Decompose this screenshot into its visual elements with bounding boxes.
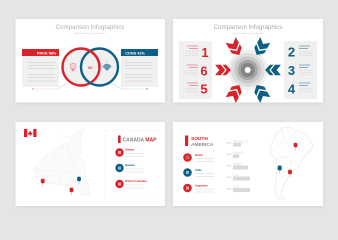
venn circles: VC [88, 66, 93, 70]
panel: six arrows [173, 19, 323, 103]
left card: pros: PROS 58% [37, 52, 57, 56]
item: quebec: Quebec [125, 163, 135, 167]
bar chart: 2016 [227, 154, 232, 156]
map pins [41, 177, 81, 196]
canada map outline [33, 129, 90, 196]
right card: cons: CONS 42% [125, 52, 145, 56]
heading: CANADA MAP [122, 138, 157, 144]
venn circles [62, 48, 118, 86]
left card [179, 41, 212, 99]
bar chart [227, 137, 250, 196]
icon: light bulb [70, 63, 76, 71]
arrows: red [215, 37, 244, 103]
panel: south america [173, 122, 323, 206]
right card [284, 41, 317, 99]
concentric target [228, 50, 268, 90]
bar chart: 2015 [227, 142, 232, 144]
item: chile [183, 168, 214, 177]
panel: venn comparison [16, 19, 165, 102]
heading: AMERICA [191, 142, 214, 148]
item: brazil: Brazil [195, 153, 203, 157]
title: Comparison Infographics [56, 24, 124, 31]
left card: 1 [201, 45, 209, 60]
heading: SOUTH [191, 136, 208, 142]
icon: canada flag [24, 129, 36, 137]
right card: 3 [288, 63, 295, 78]
right card: 4 [288, 82, 296, 96]
arrows: blue [252, 37, 281, 103]
bar chart: 2018 [227, 177, 232, 179]
item: ottawa: Ottawa [125, 148, 134, 152]
item: chile: Chile [195, 168, 202, 172]
connector lines [32, 82, 148, 90]
bar chart: 2019 [227, 188, 232, 190]
left card: 5 [200, 82, 208, 96]
side list panel [105, 130, 165, 199]
bar chart: 2017 [227, 166, 232, 168]
right card: cons [121, 49, 158, 87]
subtitle: Type The Subtitle Of Your Slide Here [233, 32, 263, 35]
map pins [278, 143, 297, 177]
icon: diamond [101, 60, 113, 71]
panel: canada map [16, 122, 165, 206]
item: argentina: Argentina [195, 184, 208, 188]
left card: 6 [200, 64, 208, 78]
item: brazil [183, 153, 214, 162]
south america map [270, 127, 313, 200]
subtitle: Type The Subtitle Of Your Slide Here [75, 32, 105, 35]
title: Comparison Infographics [214, 24, 282, 31]
left card: pros [22, 49, 59, 87]
item: british columbia: British Columbia [125, 179, 147, 183]
item: argentina [183, 184, 214, 192]
heading [185, 136, 214, 148]
right card: 2 [288, 44, 295, 60]
